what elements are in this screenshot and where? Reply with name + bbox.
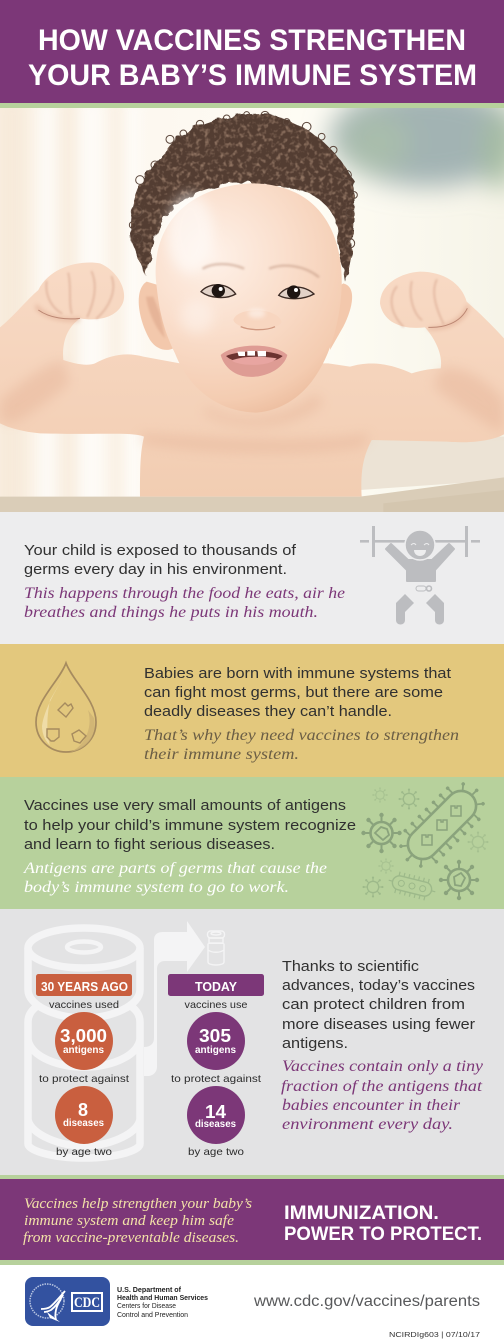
stat: 305 antigens: antigens [195, 1045, 236, 1056]
scientific advances text: antigens. [282, 1035, 348, 1052]
stat: 305 antigens: 305 [199, 1026, 231, 1046]
scientific advances text: babies encounter in their [282, 1097, 461, 1114]
footer agency names: U.S. Department of [117, 1287, 182, 1294]
large bacterium [392, 775, 492, 875]
exposure text: germs every day in his environment. [24, 561, 287, 578]
footer agency names: Health and Human Services [117, 1295, 208, 1302]
stat: 305 antigens [187, 1012, 245, 1070]
immune systems text [144, 665, 459, 763]
stat: 3,000 antigens: 3,000 [60, 1026, 107, 1046]
stat: 8 diseases: diseases [63, 1118, 104, 1129]
stat: 8 diseases [55, 1086, 113, 1144]
small bacterium [386, 870, 438, 902]
baby hair [129, 111, 357, 282]
column: 30 years ago: to protect against [39, 1073, 129, 1085]
panel: then and now comparison [0, 909, 504, 1175]
icon: large vaccine vial [28, 928, 140, 1158]
stat: 14 diseases: diseases [195, 1119, 236, 1130]
title [28, 24, 477, 92]
baby smile [221, 346, 287, 377]
stat: 14 diseases [187, 1086, 245, 1144]
scientific advances text: environment every day. [282, 1116, 453, 1133]
closing banner [0, 1175, 504, 1265]
panel: germs exposure [0, 512, 504, 644]
title: YOUR BABY’S IMMUNE SYSTEM [28, 59, 477, 92]
exposure text: This happens through the food he eats, air he [24, 585, 345, 602]
footer logo: HHS and CDC: CDC [74, 1295, 100, 1311]
scientific advances text: more diseases using fewer [282, 1016, 475, 1033]
icon: baby lifting weights [360, 526, 480, 624]
antigens text: body’s immune system to go to work. [24, 879, 289, 896]
baby face [156, 183, 342, 413]
title: HOW VACCINES STRENGTHEN [38, 24, 466, 57]
panel: antigens [0, 775, 504, 909]
antigens text: Vaccines use very small amounts of antigens [24, 797, 346, 814]
stat: 8 diseases: 8 [78, 1100, 88, 1120]
baby body and arms [0, 263, 504, 497]
immune systems text: their immune system. [144, 746, 299, 763]
footer logo: HHS and CDC [25, 1277, 110, 1326]
column: today: vaccines use [184, 999, 248, 1011]
icon: germs cluster [364, 775, 492, 902]
scientific advances text: fraction of the antigens that [281, 1078, 483, 1095]
banner slogan: IMMUNIZATION. [284, 1203, 439, 1224]
immune systems text: That’s why they need vaccines to strengthen [144, 727, 459, 744]
scientific advances text: advances, today’s vaccines [282, 977, 475, 994]
banner slogan: POWER TO PROTECT. [284, 1224, 482, 1245]
antigens text [23, 797, 356, 896]
header band [0, 0, 504, 108]
antigens text: Antigens are parts of germs that cause the [23, 860, 327, 877]
stat: 14 diseases: 14 [205, 1102, 226, 1122]
banner slogan [284, 1203, 482, 1245]
stat: 3,000 antigens [55, 1012, 113, 1070]
column: 30 years ago: vaccines used [49, 999, 119, 1011]
icon: small vaccine vial [208, 931, 224, 965]
panel: immune systems [0, 644, 504, 777]
footer agency names [117, 1287, 208, 1319]
arrow [144, 921, 205, 1076]
website url: www.cdc.gov/vaccines/parents [253, 1293, 480, 1310]
column: 30 years ago [36, 974, 132, 1158]
column: today: by age two [188, 1146, 244, 1158]
column: today [168, 974, 264, 1158]
antigens text: to help your child’s immune system recognize [24, 817, 356, 834]
exposure text: Your child is exposed to thousands of [24, 542, 297, 559]
column: today: to protect against [171, 1073, 261, 1085]
exposure text: breathes and things he puts in his mouth. [24, 604, 318, 621]
banner message: Vaccines help strengthen your baby’s [24, 1196, 252, 1212]
column: 30 years ago: by age two [56, 1146, 112, 1158]
immune systems text: Babies are born with immune systems that [144, 665, 452, 682]
publication code: NCIRDIg603 | 07/10/17 [389, 1330, 480, 1339]
banner message: from vaccine-preventable diseases. [23, 1230, 239, 1246]
scientific advances text [281, 958, 484, 1133]
footer agency names: Control and Prevention [117, 1312, 188, 1319]
baby ears [139, 282, 352, 350]
stat: 3,000 antigens: antigens [63, 1045, 104, 1056]
scientific advances text: Thanks to scientific [282, 958, 420, 975]
immune systems text: can fight most germs, but there are some [144, 684, 443, 701]
photo: baby flexing arms [0, 108, 504, 512]
column: 30 years ago: 30 YEARS AGO [41, 980, 128, 994]
icon: drop with germs [36, 663, 96, 752]
scientific advances text: can protect children from [282, 996, 465, 1013]
banner message [23, 1196, 252, 1246]
scientific advances text: Vaccines contain only a tiny [282, 1058, 484, 1075]
footer agency names: Centers for Disease [117, 1303, 176, 1310]
immune systems text: deadly diseases they can’t handle. [144, 703, 392, 720]
column: today: TODAY [195, 980, 238, 994]
banner message: immune system and keep him safe [24, 1213, 234, 1229]
exposure text [24, 542, 345, 621]
antigens text: and learn to fight serious diseases. [24, 836, 275, 853]
